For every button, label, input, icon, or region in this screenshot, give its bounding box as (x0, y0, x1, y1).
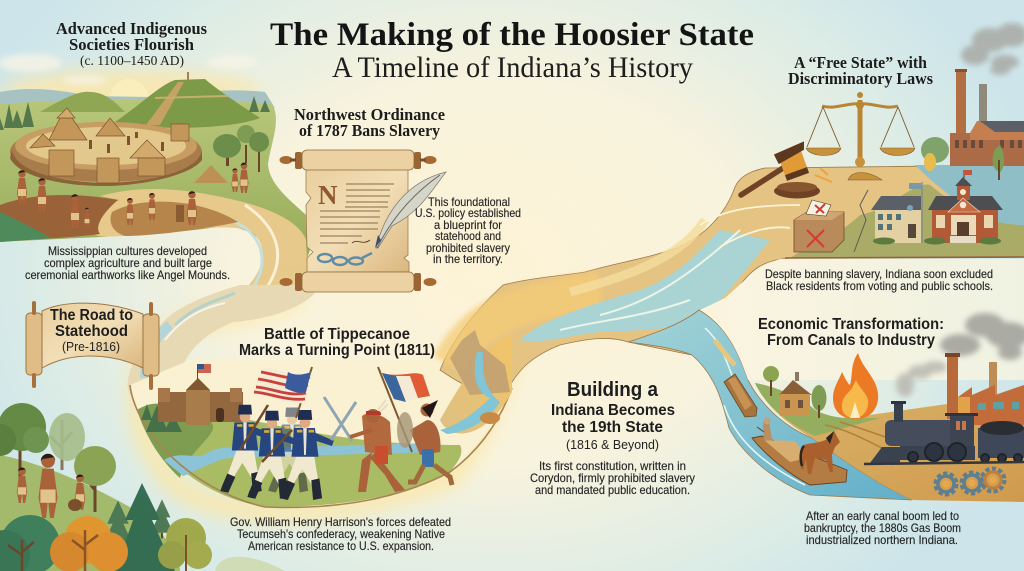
heading: building a indiana: Building a (567, 379, 659, 401)
heading: battle of tippecanoe (239, 326, 435, 359)
grey schoolhouse (871, 182, 922, 244)
text: first constitution: and mandated public education. (535, 483, 690, 497)
heading: building a indiana (551, 379, 675, 452)
crossed swords (324, 397, 356, 441)
heading: road to statehood (50, 307, 133, 354)
panel: economic transformation scene (724, 313, 1024, 502)
text: harrison: American resistance to U.S. expansion. (248, 539, 434, 553)
farmhouse (763, 366, 826, 418)
heading: battle of tippecanoe: Battle of Tippecanoe (264, 326, 410, 343)
panel: advanced indigenous societies scene (0, 54, 310, 296)
heading: battle of tippecanoe: Marks a Turning Point (1811) (239, 342, 435, 359)
heading: road to statehood: (Pre-1816) (62, 339, 120, 354)
small barge (724, 374, 757, 417)
heading: building a indiana: Indiana Becomes (551, 402, 675, 419)
panel: forest foreground (0, 403, 285, 571)
gavel (741, 146, 832, 198)
panel: winding river and battle scene (128, 285, 512, 512)
text: despite banning slavery: Black residents from voting and public schools. (766, 279, 993, 293)
title (270, 17, 754, 84)
text: canal boom (804, 509, 961, 547)
text: despite banning slavery: Despite banning slavery, Indiana soon excluded (765, 267, 993, 281)
heading: road to statehood: Statehood (55, 323, 128, 340)
ballot box (794, 200, 844, 252)
fort (158, 364, 243, 425)
heading: advanced indigenous societies: Societies Flourish (69, 35, 195, 54)
heading: economic transformation: From Canals to Industry (767, 332, 935, 349)
panel: road to statehood banner (26, 303, 159, 388)
text: foundational policy (415, 195, 521, 266)
panel: free state with discriminatory laws scene (741, 23, 1024, 258)
horse (801, 431, 840, 474)
text: canal boom: industrialized northern Indiana. (806, 533, 958, 547)
panel: northwest ordinance scroll (280, 150, 446, 292)
american flag (253, 367, 312, 418)
heading: economic transformation (758, 316, 944, 349)
heading: advanced indigenous societies: Advanced Indigenous (56, 19, 207, 38)
native flag (378, 367, 430, 452)
heading: free state (788, 53, 933, 88)
heading: economic transformation: Economic Transformation: (758, 316, 944, 333)
text: canal boom: bankruptcy, the 1880s Gas Boom (804, 521, 961, 535)
text: canal boom: After an early canal boom led to (806, 509, 959, 523)
warriors (350, 400, 452, 492)
text: foundational policy: in the territory. (433, 252, 503, 266)
text: mississippian cultures: Mississippian cultures developed (48, 244, 207, 258)
heading: building a indiana: (1816 & Beyond) (566, 437, 659, 452)
soldiers (268, 408, 319, 492)
large barge (752, 418, 847, 485)
heading: northwest ordinance (294, 105, 445, 140)
red schoolhouse (924, 170, 1003, 244)
heading: free state: Discriminatory Laws (788, 69, 933, 88)
panel: central river to the east (440, 165, 1024, 500)
heading: advanced indigenous societies: (c. 1100–1450 AD) (80, 54, 184, 69)
text: mississippian cultures (25, 244, 230, 282)
heading: northwest ordinance: of 1787 Bans Slavery (299, 121, 440, 140)
text: despite banning slavery (765, 267, 993, 293)
heading: road to statehood: The Road to (50, 307, 133, 324)
text: foundational policy: This foundational (428, 195, 510, 209)
text: foundational policy: U.S. policy established (415, 206, 521, 220)
scales of justice (806, 92, 915, 180)
factory (950, 69, 1024, 166)
text: mississippian cultures: complex agriculture and built large (44, 256, 212, 270)
gas flame (833, 353, 878, 419)
title: A Timeline of Indiana’s History (332, 51, 693, 84)
text: first constitution (530, 459, 695, 497)
text: harrison (230, 515, 451, 553)
text: harrison: Gov. William Henry Harrison's forces defeated (230, 515, 451, 529)
factory (945, 353, 1024, 425)
text: foundational policy: a blueprint for (434, 218, 502, 232)
title: The Making of the Hoosier State (270, 17, 754, 53)
text: foundational policy: prohibited slavery (426, 241, 510, 255)
text: first constitution: Its first constitution, written in (539, 459, 686, 473)
heading: building a indiana: the 19th State (562, 419, 663, 436)
gears (936, 474, 956, 494)
text: first constitution: Corydon, firmly prohibited slavery (530, 471, 695, 485)
text: mississippian cultures: ceremonial earthworks like Angel Mounds. (25, 268, 230, 282)
heading: advanced indigenous societies (56, 19, 207, 69)
heading: northwest ordinance: Northwest Ordinance (294, 105, 445, 124)
text: harrison: Tecumseh's confederacy, weakening Native (237, 527, 445, 541)
heading: free state: A “Free State” with (794, 53, 927, 72)
distant waterfall valley (440, 330, 512, 434)
steam locomotive (864, 401, 1024, 464)
text: foundational policy: statehood and (435, 229, 501, 243)
panel: northwest ordinance scroll: N (318, 180, 338, 210)
